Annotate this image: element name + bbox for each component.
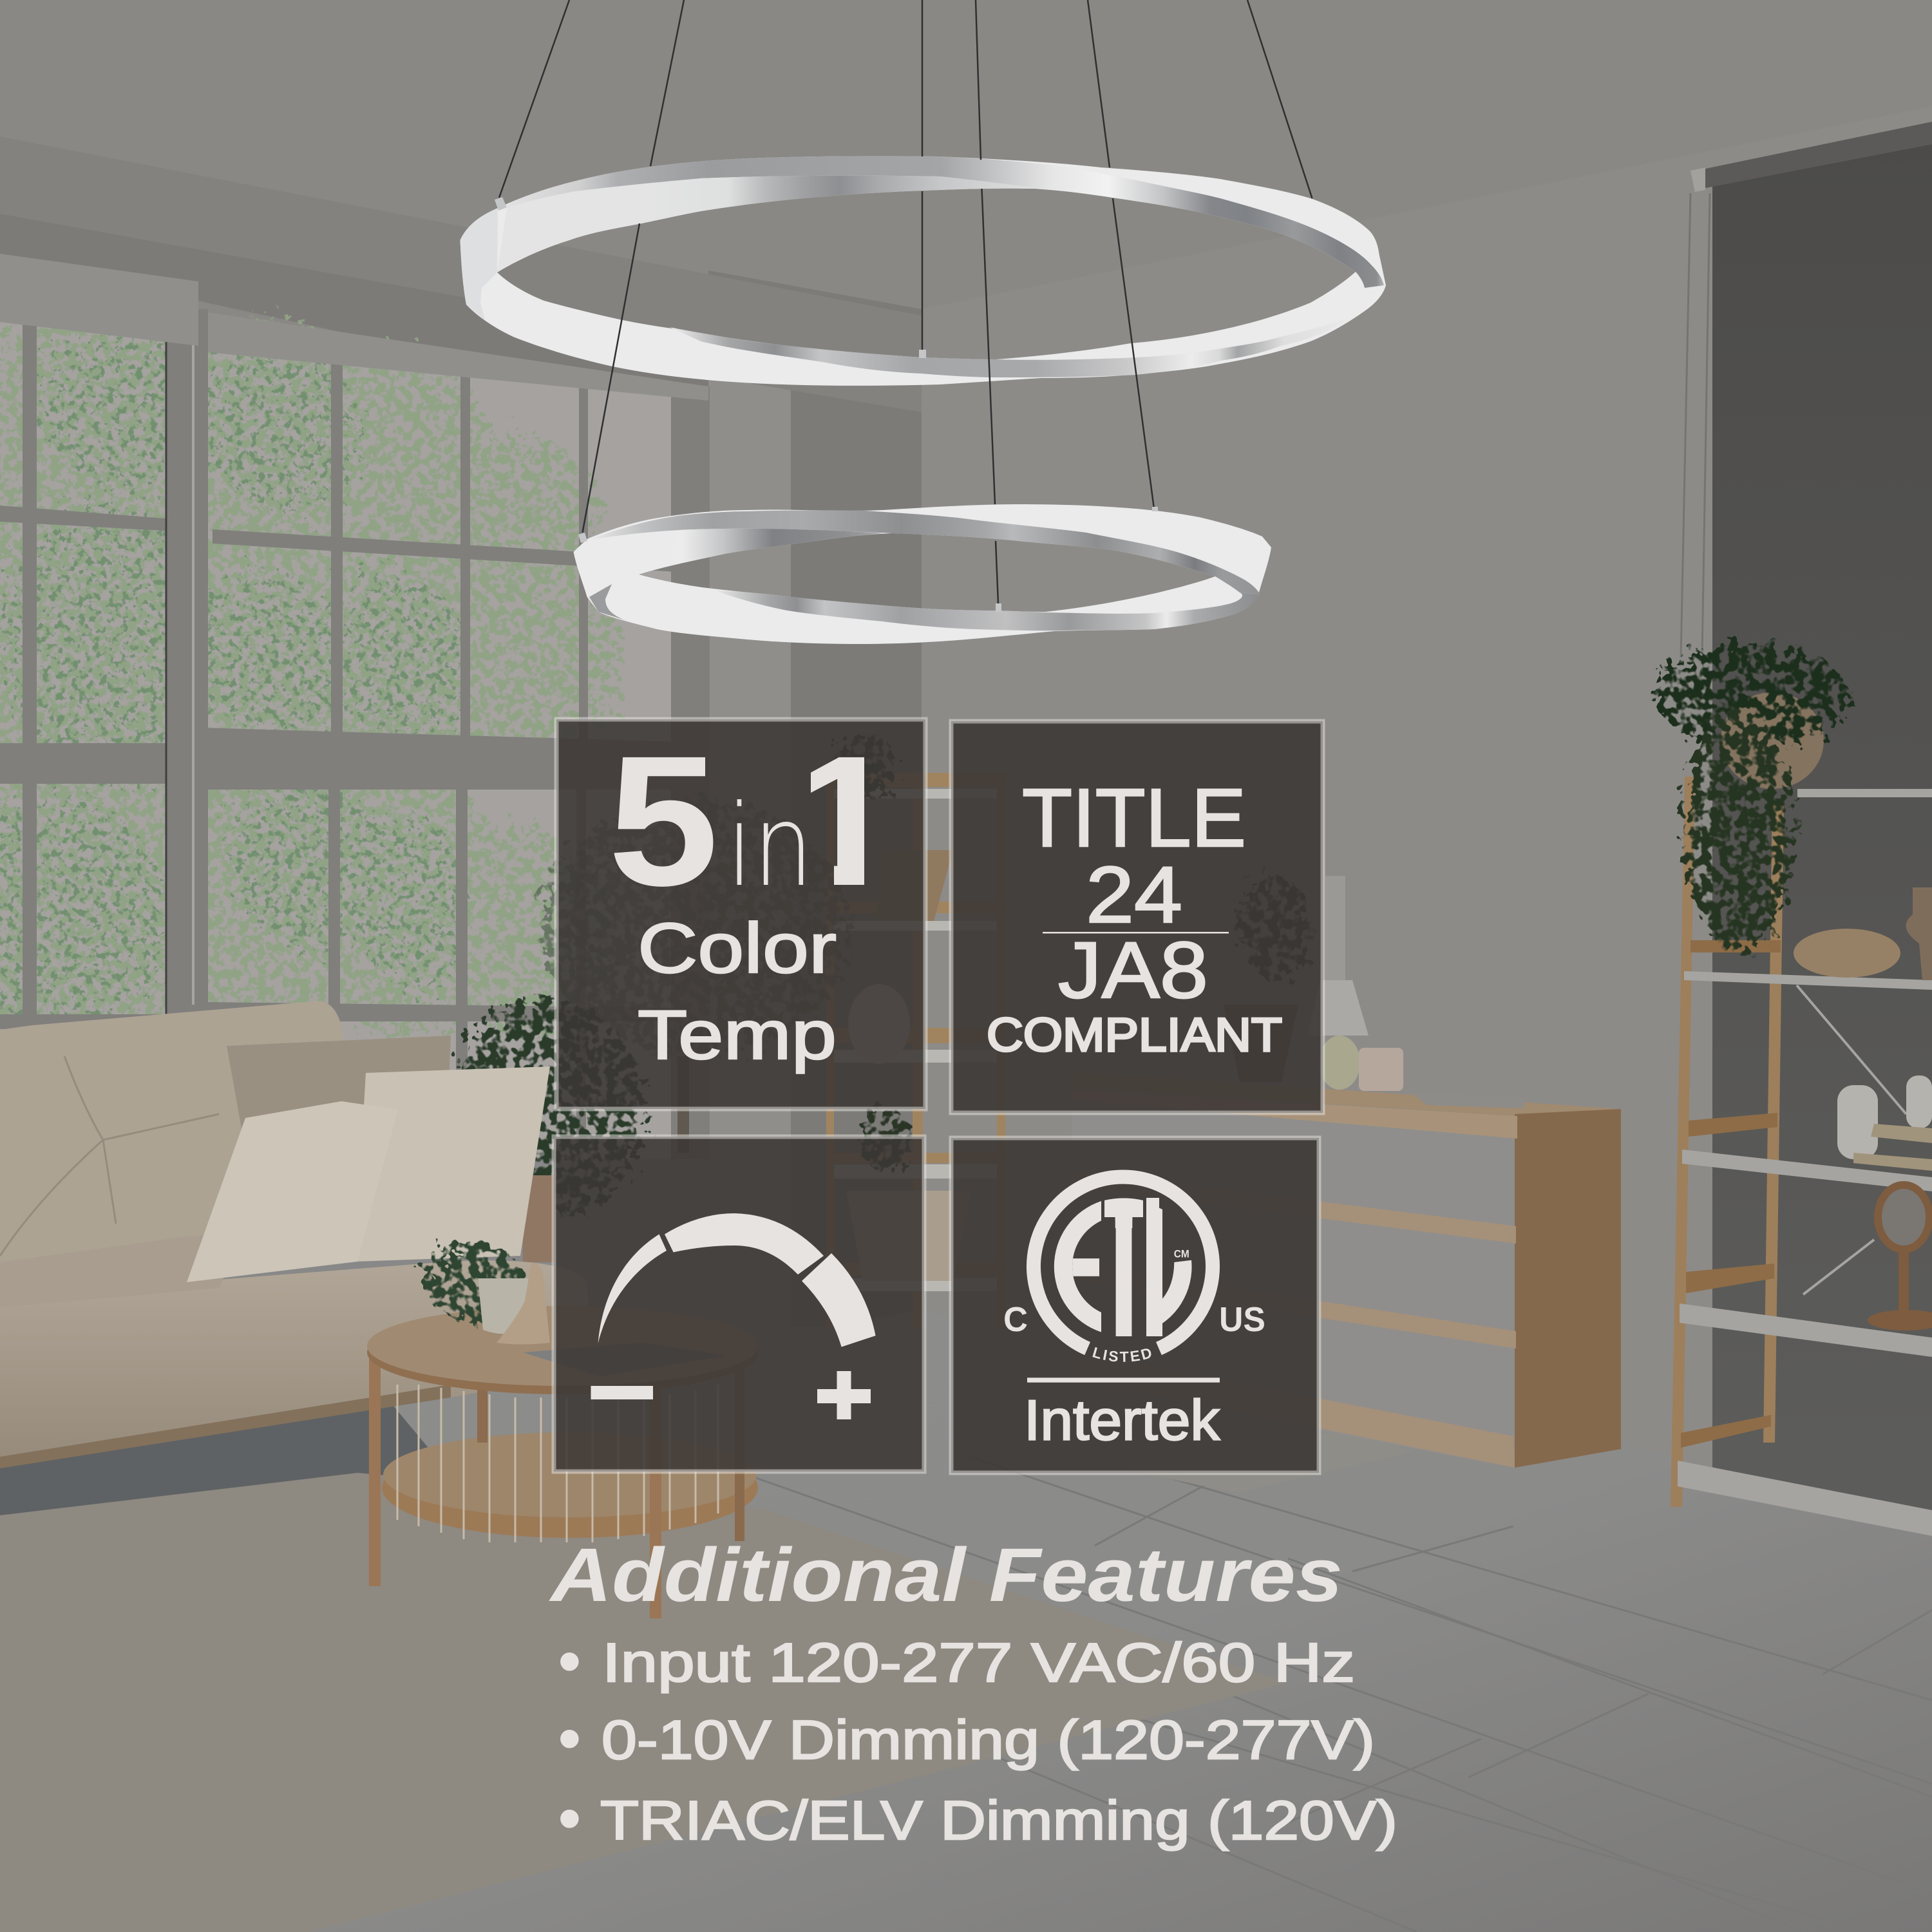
- right wall: [922, 106, 1932, 1546]
- text: Color Temp: [638, 909, 837, 1074]
- pendant light: [460, 0, 1386, 644]
- rug: [0, 1473, 1288, 1932]
- bullet item: TRIAC/ELV dimming: [558, 1781, 1397, 1856]
- bullet item: input: •: [558, 1624, 582, 1699]
- heading: 5in1: 5: [608, 717, 719, 925]
- right wall dark roller blind: [1712, 140, 1932, 1546]
- ceiling beam: [0, 137, 922, 412]
- text: 24: 24: [1086, 851, 1182, 940]
- sofa: [0, 1001, 589, 1468]
- text: C: C: [1003, 1300, 1028, 1339]
- panel: Title 24 JA8 compliant: [951, 721, 1323, 1113]
- floor plank lines: [644, 1455, 1932, 1932]
- upper ring top metallic band: [507, 156, 1384, 288]
- table decor: plant pot, figurine, magazine: [423, 1242, 726, 1376]
- upper ring: [460, 156, 1386, 386]
- feature list: [558, 1624, 1397, 1856]
- heading: 5in1: [614, 757, 864, 887]
- upper ring bottom metallic band: [670, 320, 1347, 377]
- heading: 5in1: 1: [786, 717, 909, 925]
- roller blinds over windows: [0, 254, 708, 401]
- bullet item: 0-10V dimming: [558, 1701, 1375, 1776]
- text: JA8: JA8: [1058, 926, 1208, 1015]
- text: Color Temp: Temp: [638, 996, 837, 1074]
- bullet item: input: [558, 1624, 1355, 1699]
- bullet item: 0-10V dimming: •: [558, 1701, 582, 1776]
- panel: 5 in 1 color temp: [556, 717, 925, 1109]
- icon: ETL certification mark: [1027, 1170, 1220, 1362]
- panel: dimming dial: [554, 1137, 924, 1472]
- ladder shelf behind panels: [826, 734, 1005, 1329]
- fraction line: [1043, 932, 1229, 934]
- text: Intertek: Intertek: [1024, 1388, 1220, 1452]
- bullet item: TRIAC/ELV dimming: TRIAC/ELV Dimming (120V): [600, 1790, 1397, 1852]
- tree foliage seen through window: [0, 283, 625, 1069]
- shadowed floor under sofa: [0, 1397, 451, 1526]
- indoor tree behind first panel: [541, 799, 850, 1153]
- text: COMPLIANT: COMPLIANT: [987, 1009, 1282, 1061]
- icon: ETL certification mark: T: [1102, 1155, 1146, 1379]
- ceiling: [0, 0, 1932, 451]
- heading: Additional Features: Additional Features: [549, 1533, 1343, 1618]
- heading: 5in1: in: [726, 781, 813, 912]
- dresser: [1072, 1072, 1621, 1468]
- bullet item: TRIAC/ELV dimming: •: [558, 1781, 582, 1856]
- text: TITLE: TITLE: [1022, 772, 1246, 864]
- text: US: US: [1219, 1300, 1265, 1339]
- icon: ETL certification mark: L: [1141, 1155, 1186, 1379]
- window frame bars: [0, 309, 710, 1159]
- hanging basket plant: [1655, 644, 1848, 953]
- shelf objects: [1794, 887, 1932, 1331]
- divider bar: [1027, 1378, 1220, 1383]
- floor plant next to sofa: [451, 998, 644, 1217]
- right shelving unit: [1671, 777, 1932, 1536]
- icon: plus: [817, 1371, 871, 1419]
- lower ring bottom metallic band: [715, 591, 1260, 630]
- floor: [0, 1311, 1932, 1932]
- suspension wires: [499, 0, 1312, 603]
- icon: minus: [591, 1386, 653, 1399]
- icon: dimming dial arc: [598, 1213, 876, 1347]
- left side wall return: [708, 270, 922, 1327]
- lower ring top metallic band: [589, 510, 1260, 594]
- coffee table: [367, 1306, 759, 1618]
- panel: ETL listed Intertek: [949, 1136, 1321, 1475]
- window glass: [0, 309, 708, 1159]
- lower ring: [573, 504, 1271, 644]
- upper ring inner metallic band: [497, 176, 1041, 272]
- icon: ETL certification mark: E: [1050, 1173, 1121, 1365]
- icon: ETL certification mark: LISTED: [1092, 1347, 1151, 1362]
- icon: ETL certification mark: CM: [1174, 1249, 1189, 1260]
- lower ring inner metallic band: [673, 529, 883, 564]
- dresser decor: lamp, vase, cup, book, frame: [1224, 876, 1524, 1108]
- lower ring left sliver: [589, 584, 625, 620]
- wire studs: [495, 197, 1158, 612]
- bullet item: input: Input 120-277 VAC/60 Hz: [602, 1633, 1355, 1694]
- small rug under dresser: [966, 1433, 1410, 1493]
- upper ring left shaded face: [460, 208, 498, 320]
- bullet item: 0-10V dimming: 0-10V Dimming (120-277V): [601, 1710, 1375, 1771]
- text: Color Temp: Color: [638, 909, 837, 988]
